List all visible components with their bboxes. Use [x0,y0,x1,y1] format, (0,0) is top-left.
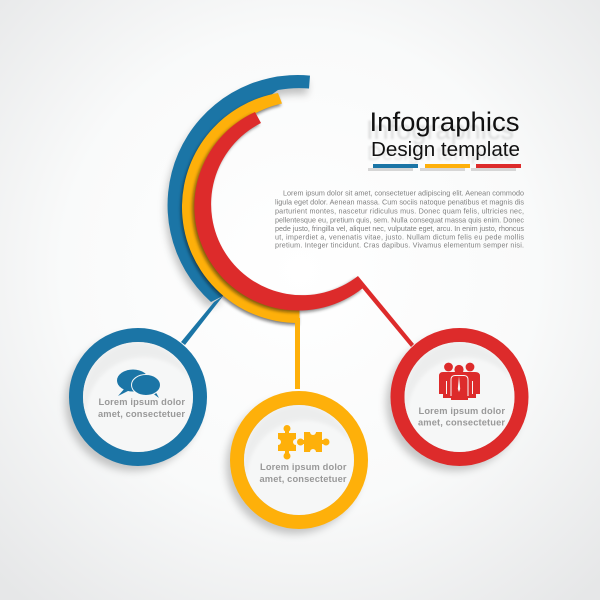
label: Lorem ipsum dolor [260,462,347,472]
label: amet, consectetuer [418,418,505,428]
label: Lorem ipsum dolor [98,397,185,407]
icon: speech bubbles [117,370,160,398]
title: Infographics [366,115,514,145]
title colour bars [368,164,521,171]
connector: blue [181,296,223,345]
label [260,462,347,484]
body text: pretium. Integer tincidunt. Cras dapibus. Vivamus elementum semper nisi. [275,240,524,250]
panel: red circle [386,335,522,471]
arc: red [194,112,363,311]
body text: pellentesque eu, pretium quis, sem. Nulla consequat massa quis enim. Donec [275,216,524,224]
body text: parturient montes, nascetur ridiculus mus. Donec quam felis, ultricies nec, [275,206,524,216]
connector: yellow [295,318,300,389]
label: Lorem ipsum dolor [418,406,505,416]
arc: blue [168,75,310,302]
body text: pede justo, fringilla vel, aliquet nec, vulputate eget, arcu. In enim justo, rhoncus [275,224,524,233]
title: Design template [367,143,515,165]
panel: blue circle [65,335,201,471]
body text: ut, imperdiet a, venenatis vitae, justo. Nullam dictum felis eu pede mollis [275,232,524,242]
icon: group of people [439,363,480,400]
title: Infographics [370,107,520,137]
connector: red [358,276,414,347]
icon: puzzle pieces [275,425,330,460]
label: amet, consectetuer [260,474,347,484]
label [418,406,505,428]
title: Design template [371,139,520,161]
label [98,397,185,419]
arc: yellow [182,93,300,323]
body text: Lorem ipsum dolor sit amet, consectetuer adipiscing elit. Aenean commodo [283,188,524,198]
label: amet, consectetuer [98,409,185,419]
title [366,107,520,165]
body text: ligula eget dolor. Aenean massa. Cum sociis natoque penatibus et magnis dis [275,198,524,206]
body text [275,188,524,250]
main arcs [166,75,414,389]
panel: yellow circle [226,398,362,534]
